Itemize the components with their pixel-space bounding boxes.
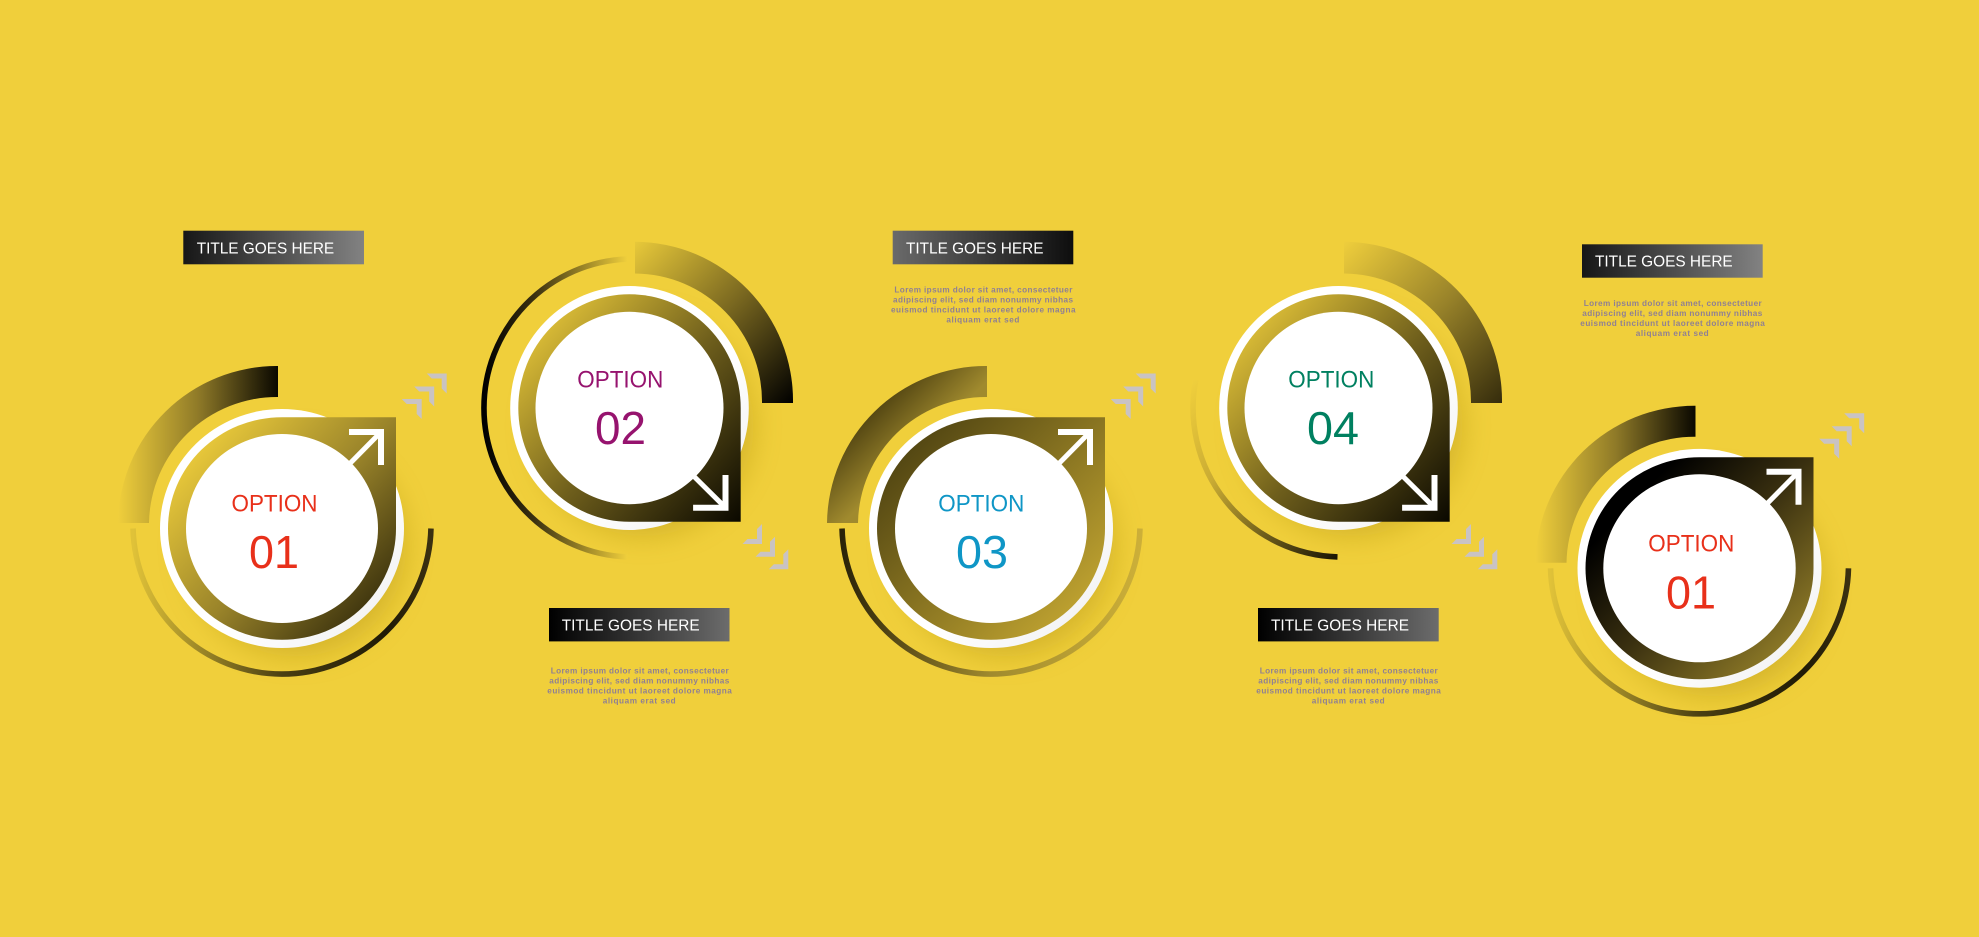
teardrop ring bbox=[518, 294, 741, 522]
thick arc bbox=[1344, 242, 1502, 403]
title bar 5 bbox=[1582, 244, 1763, 278]
teardrop ring bbox=[1586, 457, 1814, 679]
title bar 3: TITLE GOES HERE bbox=[906, 240, 1044, 257]
white disc bbox=[160, 409, 404, 648]
body text 4: Lorem ipsum dolor sit amet, consectetuer bbox=[1260, 666, 1439, 675]
white disc bbox=[1219, 286, 1458, 530]
body text 3: euismod tincidunt ut laoreet dolore magna bbox=[891, 305, 1076, 314]
body text 4: aliquam erat sed bbox=[1312, 696, 1385, 705]
white disc bbox=[1578, 449, 1822, 688]
shadow bbox=[534, 316, 754, 536]
thick arc bbox=[118, 366, 278, 523]
chevrons bbox=[742, 524, 788, 569]
body text 4 bbox=[1256, 666, 1441, 705]
title bar 1: TITLE GOES HERE bbox=[197, 240, 334, 257]
inner white circle bbox=[1244, 312, 1432, 504]
inner white circle bbox=[1603, 474, 1796, 662]
icon: arrow bbox=[1762, 472, 1798, 509]
number: 02 bbox=[595, 402, 646, 454]
icon: arrow bbox=[688, 471, 726, 508]
thin arc bbox=[1193, 380, 1338, 557]
icon: arrow bbox=[344, 432, 381, 470]
panel: option 01 left bbox=[118, 366, 447, 674]
body text 2 bbox=[547, 666, 732, 705]
number: 01 bbox=[249, 526, 299, 578]
chevrons bbox=[1452, 524, 1497, 569]
shadow bbox=[895, 436, 1115, 656]
number: 01 bbox=[1666, 566, 1716, 618]
label: option: OPTION bbox=[938, 491, 1024, 518]
title bar 4 bbox=[1258, 608, 1439, 641]
body text 3: Lorem ipsum dolor sit amet, consectetuer bbox=[894, 285, 1073, 294]
thin arc bbox=[842, 528, 1140, 674]
thin arc bbox=[133, 528, 431, 674]
body text 3 bbox=[891, 285, 1076, 324]
body text 2: euismod tincidunt ut laoreet dolore magna bbox=[547, 686, 732, 695]
body text 5: aliquam erat sed bbox=[1636, 329, 1709, 338]
teardrop ring bbox=[877, 417, 1105, 640]
label: option: OPTION bbox=[1288, 366, 1374, 393]
panel: option 04 bbox=[1193, 242, 1502, 569]
thick arc bbox=[1536, 406, 1696, 563]
body text 5: adipiscing elit, sed diam nonummy nibhas bbox=[1582, 309, 1763, 318]
body text 4: adipiscing elit, sed diam nonummy nibhas bbox=[1258, 676, 1439, 685]
thick arc bbox=[827, 366, 987, 523]
panel: option 01 right bbox=[1536, 406, 1864, 714]
inner white circle bbox=[186, 434, 378, 623]
panel: option 02 bbox=[484, 242, 793, 569]
thin arc bbox=[1551, 568, 1848, 714]
number: 03 bbox=[956, 526, 1008, 578]
title bar 5: TITLE GOES HERE bbox=[1595, 254, 1733, 271]
panel: option 03 bbox=[827, 366, 1156, 674]
body text 5: euismod tincidunt ut laoreet dolore magna bbox=[1580, 319, 1765, 328]
thin arc bbox=[484, 259, 628, 557]
teardrop ring bbox=[168, 417, 396, 640]
title bar 2 bbox=[549, 608, 730, 641]
body text 3: aliquam erat sed bbox=[946, 315, 1019, 324]
white disc bbox=[869, 409, 1113, 648]
chevrons bbox=[1819, 413, 1864, 459]
teardrop ring bbox=[1227, 294, 1450, 522]
icon: arrow bbox=[1053, 432, 1090, 470]
body text 2: adipiscing elit, sed diam nonummy nibhas bbox=[549, 676, 730, 685]
white disc bbox=[510, 286, 749, 530]
body text 2: Lorem ipsum dolor sit amet, consectetuer bbox=[551, 666, 730, 675]
title bar 3 bbox=[893, 231, 1073, 264]
body text 2: aliquam erat sed bbox=[603, 696, 676, 705]
inner white circle bbox=[536, 312, 724, 504]
label: option: OPTION bbox=[1648, 531, 1734, 558]
title bar 4: TITLE GOES HERE bbox=[1271, 618, 1409, 634]
chevrons bbox=[1111, 374, 1156, 419]
number: 04 bbox=[1307, 402, 1359, 454]
inner white circle bbox=[895, 434, 1087, 623]
label: option: OPTION bbox=[232, 491, 318, 518]
icon: arrow bbox=[1398, 471, 1434, 508]
shadow bbox=[1604, 476, 1824, 696]
title bar 1 bbox=[183, 231, 364, 264]
body text 4: euismod tincidunt ut laoreet dolore magna bbox=[1256, 686, 1441, 695]
body text 5: Lorem ipsum dolor sit amet, consectetuer bbox=[1584, 299, 1763, 308]
body text 3: adipiscing elit, sed diam nonummy nibhas bbox=[893, 295, 1073, 304]
body text 5 bbox=[1580, 299, 1765, 338]
chevrons bbox=[402, 374, 447, 419]
title bar 2: TITLE GOES HERE bbox=[562, 618, 700, 634]
thick arc bbox=[635, 242, 793, 403]
label: option: OPTION bbox=[577, 366, 663, 393]
shadow bbox=[186, 436, 406, 656]
shadow bbox=[1242, 316, 1462, 536]
